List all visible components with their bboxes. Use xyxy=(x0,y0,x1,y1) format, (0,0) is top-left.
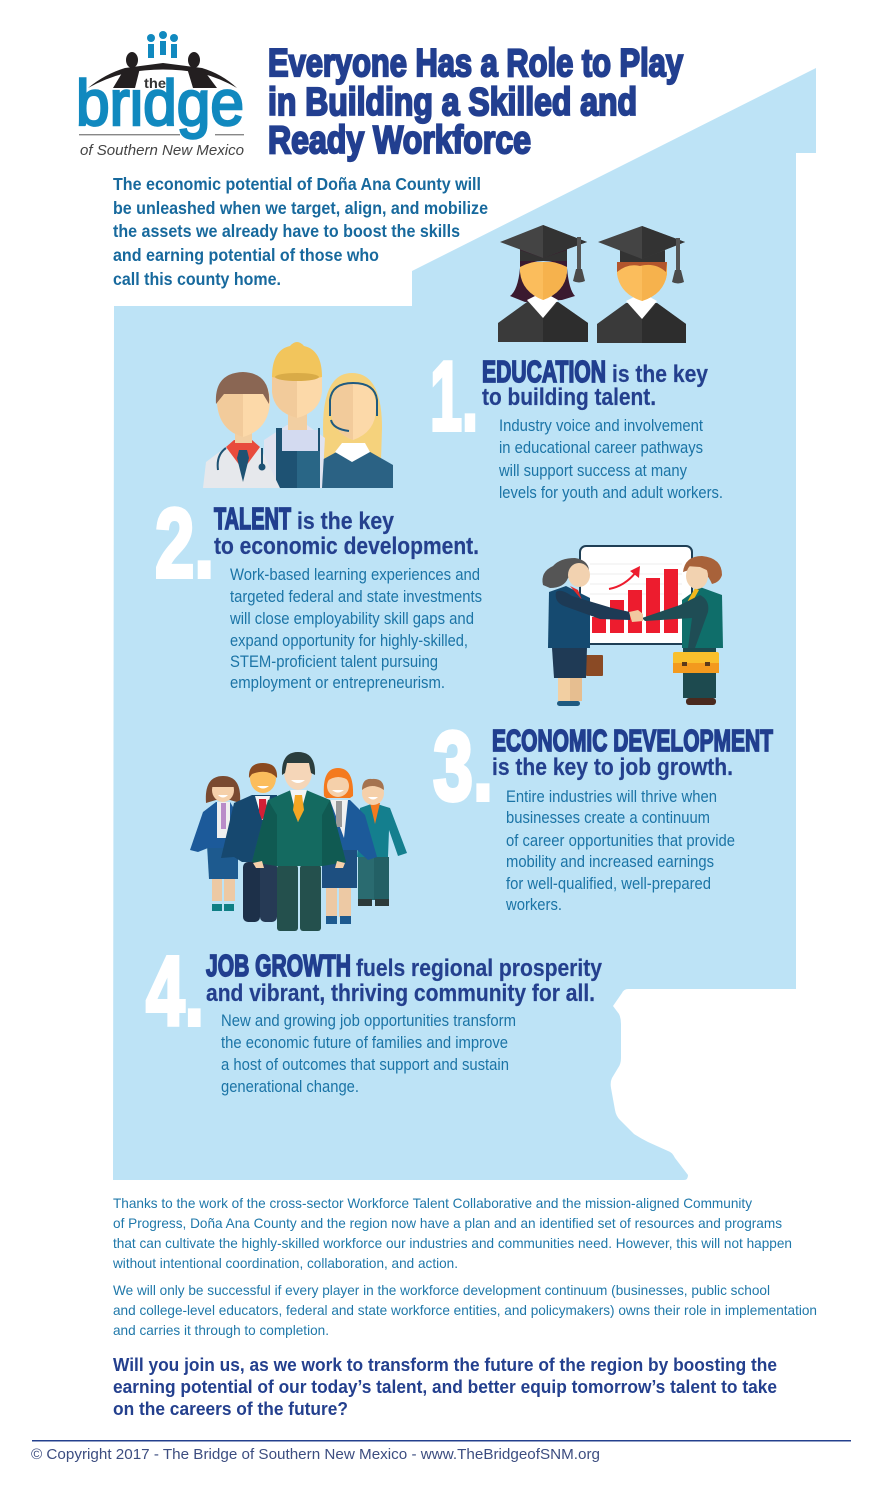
call to action: earning potential of our today’s talent, and better equip tomorrow’s talent to take xyxy=(113,1377,777,1397)
heading 3 xyxy=(492,723,773,781)
body 4: the economic future of families and improve xyxy=(221,1034,508,1052)
closing paragraph 2: and college-level educators, federal and state workforce entities, and policymakers) owns their role in implementation xyxy=(113,1302,817,1318)
far left woman xyxy=(190,776,240,911)
icon: construction worker xyxy=(264,342,325,488)
body 2: employment or entrepreneurism. xyxy=(230,674,445,692)
closing paragraph 2 xyxy=(113,1282,817,1338)
icon: business team xyxy=(190,752,407,931)
section 3: economic development xyxy=(433,711,773,914)
body 2 xyxy=(229,566,482,692)
logo: The Bridge of Southern New Mexico: bridge xyxy=(76,67,244,139)
body 2: expand opportunity for highly-skilled, xyxy=(230,632,468,650)
body 1: levels for youth and adult workers. xyxy=(499,484,723,502)
body 3: businesses create a continuum xyxy=(506,809,710,827)
section 4: job growth xyxy=(146,936,603,1096)
icon: workers group xyxy=(203,342,393,488)
body 4: generational change. xyxy=(221,1078,359,1096)
heading 2 xyxy=(214,501,479,560)
call to action xyxy=(113,1355,777,1419)
number 3: 3. xyxy=(433,711,493,821)
closing paragraph 1: that can cultivate the highly-skilled workforce our industries and communities need. However, this will not happen xyxy=(113,1235,792,1251)
right woman xyxy=(322,768,377,924)
number 4: 4. xyxy=(146,936,204,1046)
closing paragraph 1: of Progress, Doña Ana County and the region now have a plan and an identified set of resources and programs xyxy=(113,1215,782,1231)
title: Everyone Has a Role to Play xyxy=(268,42,683,85)
logo: The Bridge of Southern New Mexico xyxy=(76,31,244,159)
section 2: talent xyxy=(155,488,482,692)
logo: The Bridge of Southern New Mexico: of Southern New Mexico xyxy=(80,142,244,159)
number 2: 2. xyxy=(155,488,214,598)
chart board xyxy=(580,546,692,644)
section 1: education xyxy=(430,341,723,502)
closing paragraph 1 xyxy=(112,1195,792,1271)
heading 2: is the key xyxy=(297,508,395,535)
intro text: call this county home. xyxy=(113,269,281,289)
heading 4: fuels regional prosperity xyxy=(356,955,603,982)
body 3: for well-qualified, well-prepared xyxy=(506,875,711,893)
body 2: Work-based learning experiences and xyxy=(230,566,480,584)
title: Ready Workforce xyxy=(268,119,531,162)
heading 1: EDUCATION xyxy=(482,354,606,389)
background county shape xyxy=(113,68,816,1180)
body 2: targeted federal and state investments xyxy=(230,588,482,606)
number 1: 1. xyxy=(430,341,478,451)
body 1: in educational career pathways xyxy=(499,439,703,457)
intro text: and earning potential of those who xyxy=(113,245,379,265)
body 4 xyxy=(221,1012,516,1096)
heading 4 xyxy=(206,948,603,1007)
icon: female graduate xyxy=(498,225,588,342)
heading 1: is the key xyxy=(612,361,709,388)
copyright: © Copyright 2017 - The Bridge of Southern New Mexico - www.TheBridgeofSNM.org xyxy=(31,1446,600,1463)
icon: doctor xyxy=(203,372,280,488)
icon: graduates xyxy=(498,225,686,343)
call to action: on the careers of the future? xyxy=(113,1399,348,1419)
closing paragraph 2: We will only be successful if every player in the workforce development continuum (businesses, public school xyxy=(113,1282,770,1298)
intro text: The economic potential of Doña Ana County will xyxy=(113,174,481,194)
man in suit xyxy=(629,556,723,705)
woman in suit xyxy=(542,558,630,706)
closing paragraph 1: without intentional coordination, collaboration, and action. xyxy=(112,1255,458,1271)
heading 4: JOB GROWTH xyxy=(206,948,351,983)
intro text: the assets we already have to boost the skills xyxy=(113,221,460,241)
icon: handshake with chart xyxy=(542,546,723,706)
icon: male graduate xyxy=(597,226,686,343)
body 4: New and growing job opportunities transform xyxy=(221,1012,516,1030)
heading 3: is the key to job growth. xyxy=(492,754,733,781)
body 1: Industry voice and involvement xyxy=(499,417,703,435)
body 1 xyxy=(498,417,723,502)
far right man xyxy=(357,779,407,906)
heading 2: TALENT xyxy=(214,501,291,536)
heading 1: to building talent. xyxy=(482,384,656,411)
body 4: a host of outcomes that support and sustain xyxy=(221,1056,509,1074)
centre man xyxy=(252,752,346,931)
intro text: be unleashed when we target, align, and mobilize xyxy=(113,198,488,218)
body 3: Entire industries will thrive when xyxy=(506,788,717,806)
call to action: Will you join us, as we work to transform the future of the region by boosting the xyxy=(113,1355,777,1375)
closing paragraph 1: Thanks to the work of the cross-sector Workforce Talent Collaborative and the mission-aligned Community xyxy=(113,1195,752,1211)
heading 2: to economic development. xyxy=(214,533,479,560)
left man xyxy=(221,763,277,922)
closing paragraph 2: and carries it through to completion. xyxy=(113,1322,329,1338)
icon: call centre woman xyxy=(320,373,393,488)
body 3: mobility and increased earnings xyxy=(506,853,714,871)
title: in Building a Skilled and xyxy=(268,81,637,124)
body 1: will support success at many xyxy=(498,462,688,480)
body 2: will close employability skill gaps and xyxy=(229,610,474,628)
body 2: STEM-proficient talent pursuing xyxy=(230,653,438,671)
intro text xyxy=(113,174,488,289)
body 3: workers. xyxy=(505,896,562,914)
footer rule xyxy=(32,1440,851,1442)
heading 4: and vibrant, thriving community for all. xyxy=(206,980,595,1007)
heading 1 xyxy=(482,354,709,411)
body 3: of career opportunities that provide xyxy=(506,832,735,850)
title xyxy=(268,42,683,162)
body 3 xyxy=(505,788,735,914)
logo: The Bridge of Southern New Mexico: the xyxy=(144,75,166,91)
